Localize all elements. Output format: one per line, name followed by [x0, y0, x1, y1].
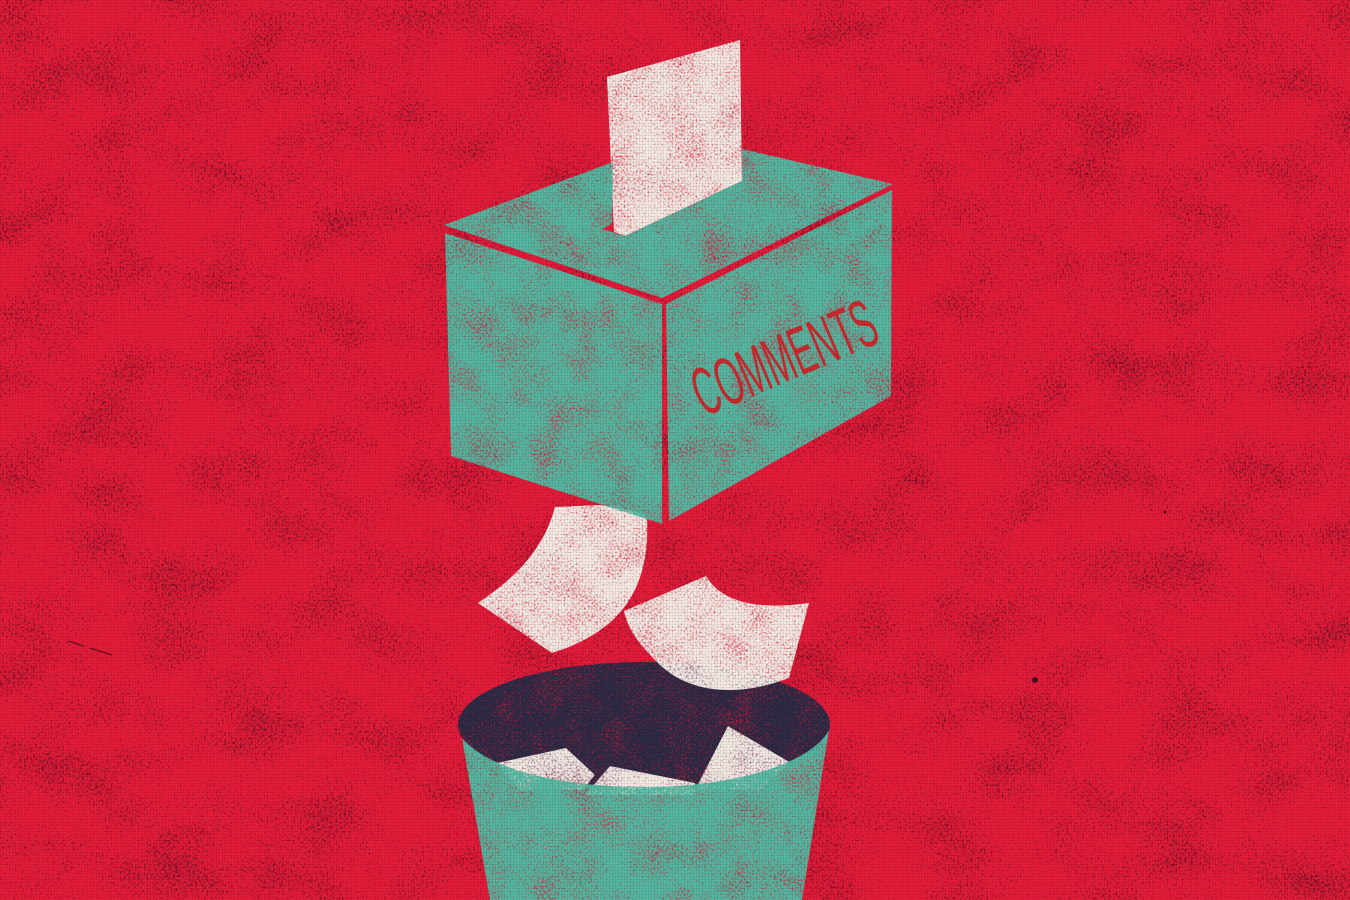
box lid with slot: [444, 149, 893, 298]
waste bin body: [462, 730, 829, 900]
ballot box: [444, 149, 893, 524]
comments label: COMMENTS: [680, 285, 888, 431]
falling paper right: [624, 576, 809, 690]
ballot paper entering the slot: [607, 40, 742, 236]
canvas specks and scratch: [68, 510, 1166, 683]
falling paper left: [478, 505, 647, 653]
box left face: [445, 233, 662, 524]
bin opening: [458, 662, 830, 788]
ballot slot: [602, 224, 625, 236]
papers inside the bin: [497, 726, 791, 795]
box right face: [666, 190, 892, 521]
